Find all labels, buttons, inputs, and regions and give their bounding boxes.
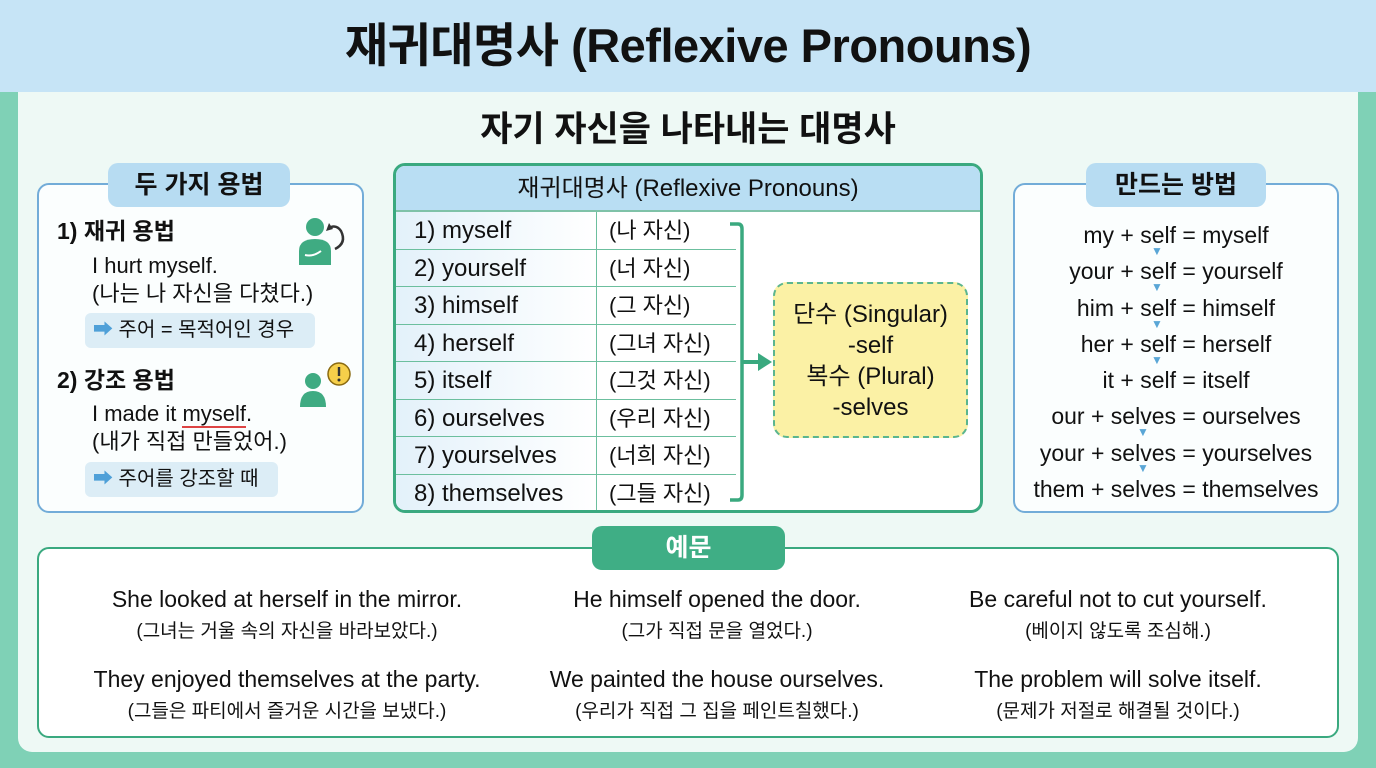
panel: pronoun table	[393, 163, 983, 513]
table rows: 3) himself	[414, 292, 518, 319]
formula list: her + self = herself	[1081, 331, 1271, 357]
callout 1	[85, 313, 315, 348]
table header: 재귀대명사 (Reflexive Pronouns)	[517, 175, 859, 202]
example col 1	[112, 586, 462, 642]
table rows: (그 자신)	[609, 293, 690, 318]
down arrows	[1151, 244, 1163, 367]
header band	[0, 0, 1376, 92]
formula list: it + self = itself	[1102, 367, 1250, 393]
formula list: them + selves = themselves	[1033, 476, 1319, 502]
formula list: my + self = myself	[1083, 222, 1269, 248]
bracket and arrow	[730, 222, 772, 502]
table rows: 8) themselves	[414, 480, 563, 506]
table header	[396, 166, 980, 212]
callout: singular/plural	[773, 282, 968, 438]
example 1	[92, 253, 313, 306]
panel: two uses	[37, 163, 364, 513]
example 2	[92, 401, 287, 454]
table rows: 5) itself	[414, 367, 491, 394]
tab: 두 가지 용법	[108, 163, 290, 207]
table rows: 2) yourself	[414, 254, 526, 282]
table rows	[396, 212, 736, 510]
panel: examples: The problem will solve itself.	[974, 666, 1262, 692]
example 2: I made it myself.	[92, 401, 252, 426]
heading: 2) emphasis: 2) 강조 용법	[57, 367, 175, 393]
callout: singular/plural: 단수 (Singular)	[793, 301, 948, 328]
panel: how to make	[1013, 163, 1339, 513]
table rows: 6) ourselves	[414, 404, 545, 432]
example 1: (나는 나 자신을 다쳤다.)	[92, 281, 313, 306]
table rows: (그들 자신)	[609, 480, 711, 506]
example col 3	[969, 586, 1267, 642]
formula list: our + selves = ourselves	[1051, 403, 1301, 429]
down arrows: ▼	[1151, 353, 1163, 367]
icon: person with arrow	[299, 218, 344, 265]
callout 2	[85, 462, 278, 497]
table rows: (그녀 자신)	[609, 330, 711, 356]
formula list: your + self = yourself	[1069, 258, 1283, 284]
icon: person with exclamation	[300, 362, 351, 407]
panel: examples: (그들은 파티에서 즐거운 시간을 보냈다.)	[128, 701, 446, 722]
panel: examples: We painted the house ourselves.	[550, 666, 884, 692]
table rows: 7) yourselves	[414, 442, 557, 469]
table rows: (그것 자신)	[609, 368, 711, 393]
example 2: (내가 직접 만들었어.)	[92, 429, 287, 454]
callout 1: ➡ 주어 = 목적어인 경우	[93, 319, 294, 341]
panel: examples: They enjoyed themselves at the party.	[94, 666, 480, 692]
example col 3: Be careful not to cut yourself.	[969, 586, 1267, 612]
title: 재귀대명사 (Reflexive Pronouns)	[345, 19, 1031, 72]
subtitle: 자기 자신을 나타내는 대명사	[480, 110, 896, 149]
tab: 만드는 방법	[1086, 163, 1266, 207]
heading: 1) reflexive: 1) 재귀 용법	[57, 218, 175, 244]
example col 2: (그가 직접 문을 열었다.)	[621, 621, 813, 642]
table rows: 4) herself	[414, 330, 514, 356]
panel: examples: (문제가 저절로 해결될 것이다.)	[996, 701, 1240, 722]
callout: singular/plural: -selves	[832, 394, 909, 421]
example col 2	[573, 586, 861, 642]
callout: singular/plural: -self	[848, 332, 893, 359]
panel: examples	[37, 526, 1339, 738]
tab: 예문	[592, 526, 785, 570]
table rows: (우리 자신)	[609, 406, 711, 430]
example 1: I hurt myself.	[92, 253, 218, 278]
example col 1: (그녀는 거울 속의 자신을 바라보았다.)	[136, 621, 438, 642]
example col 1: She looked at herself in the mirror.	[112, 586, 462, 612]
callout 2: ➡ 주어를 강조할 때	[93, 468, 258, 490]
callout: singular/plural: 복수 (Plural)	[806, 363, 935, 390]
tab: 만드는 방법: 만드는 방법	[1115, 171, 1237, 199]
tab: 두 가지 용법: 두 가지 용법	[135, 171, 263, 199]
panel: how to make: ▼	[1137, 425, 1149, 439]
tab: 예문: 예문	[665, 534, 712, 562]
example col 2: He himself opened the door.	[573, 586, 861, 612]
panel: how to make: ▼	[1137, 461, 1149, 475]
example col 3: (베이지 않도록 조심해.)	[1025, 621, 1211, 642]
down arrows: ▼	[1151, 280, 1163, 294]
formula list	[1033, 222, 1319, 502]
table rows: (나 자신)	[609, 218, 690, 243]
table rows: (너 자신)	[609, 256, 690, 280]
table rows: (너희 자신)	[609, 443, 711, 468]
down arrows: ▼	[1151, 317, 1163, 331]
down arrows: ▼	[1151, 244, 1163, 258]
formula list: your + selves = yourselves	[1040, 440, 1312, 466]
table rows: 1) myself	[414, 217, 511, 244]
panel: examples: (우리가 직접 그 집을 페인트칠했다.)	[575, 701, 859, 722]
formula list: him + self = himself	[1077, 295, 1275, 321]
